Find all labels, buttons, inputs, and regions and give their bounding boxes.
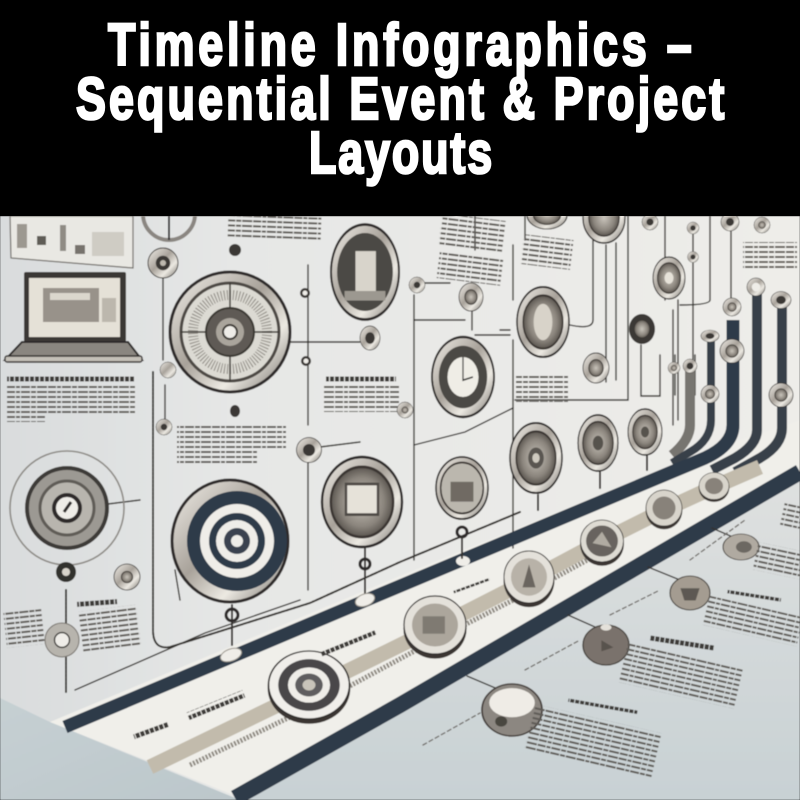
medallion: wall coin 3 [578, 415, 618, 471]
strip labels [133, 576, 490, 741]
medallion: big dial [170, 272, 290, 392]
medallion: strip 6 [699, 472, 729, 502]
text blocks on wall [3, 213, 797, 653]
medallion: icon coin [322, 457, 402, 547]
small timeline nodes on wall [45, 213, 770, 657]
title [76, 13, 724, 187]
medallion: top coin 6 [582, 216, 626, 244]
lower navy band [235, 472, 800, 798]
badge 3 [670, 576, 710, 610]
main wall band [65, 320, 733, 727]
medallion: strip 3 [504, 551, 554, 607]
medallion: target [172, 480, 288, 602]
small nodes on tracks [668, 278, 793, 407]
badge 4 [723, 534, 759, 560]
floor text blocks [524, 502, 800, 778]
floor badges [482, 534, 759, 736]
medallion: document coin [436, 457, 488, 519]
title: Sequential Event & Project [76, 67, 724, 133]
badge 2 [583, 624, 629, 665]
floor left [0, 698, 240, 800]
white timeline strip [50, 599, 374, 794]
title: Timeline Infographics – [108, 13, 692, 79]
title banner [0, 0, 800, 216]
pins onto the band [219, 456, 647, 664]
icon: laptop [5, 272, 142, 362]
medallions on the strip [268, 472, 729, 724]
medallion: left ring diagram [10, 451, 124, 565]
label header [325, 376, 397, 382]
medallion: wall coin 2 [510, 423, 562, 493]
beige strip [150, 467, 760, 767]
vertical tracks and main band [65, 290, 800, 798]
timeline illustration [0, 188, 800, 800]
medallion: strip 1 [268, 651, 350, 724]
badge 1 [482, 684, 542, 736]
medallion: wall coin 4 [628, 409, 662, 455]
medallion: wall coin 1 [517, 287, 569, 357]
medallion: strip 5 [646, 490, 682, 529]
floor right [240, 472, 800, 800]
medallion: strip 2 [403, 596, 467, 659]
floor connectors [423, 520, 745, 745]
wiring lines [66, 215, 731, 692]
medallion: top partial [140, 216, 198, 242]
medallion: strip 4 [580, 520, 624, 566]
title: Layouts [309, 121, 492, 187]
medallion: clock [432, 337, 494, 417]
wall background [0, 216, 800, 800]
medallion: building coin [331, 224, 399, 320]
medallion: top coin 7 [526, 216, 568, 230]
medallion: wall coin 5 [653, 257, 685, 299]
frame diagram top left [10, 216, 133, 268]
